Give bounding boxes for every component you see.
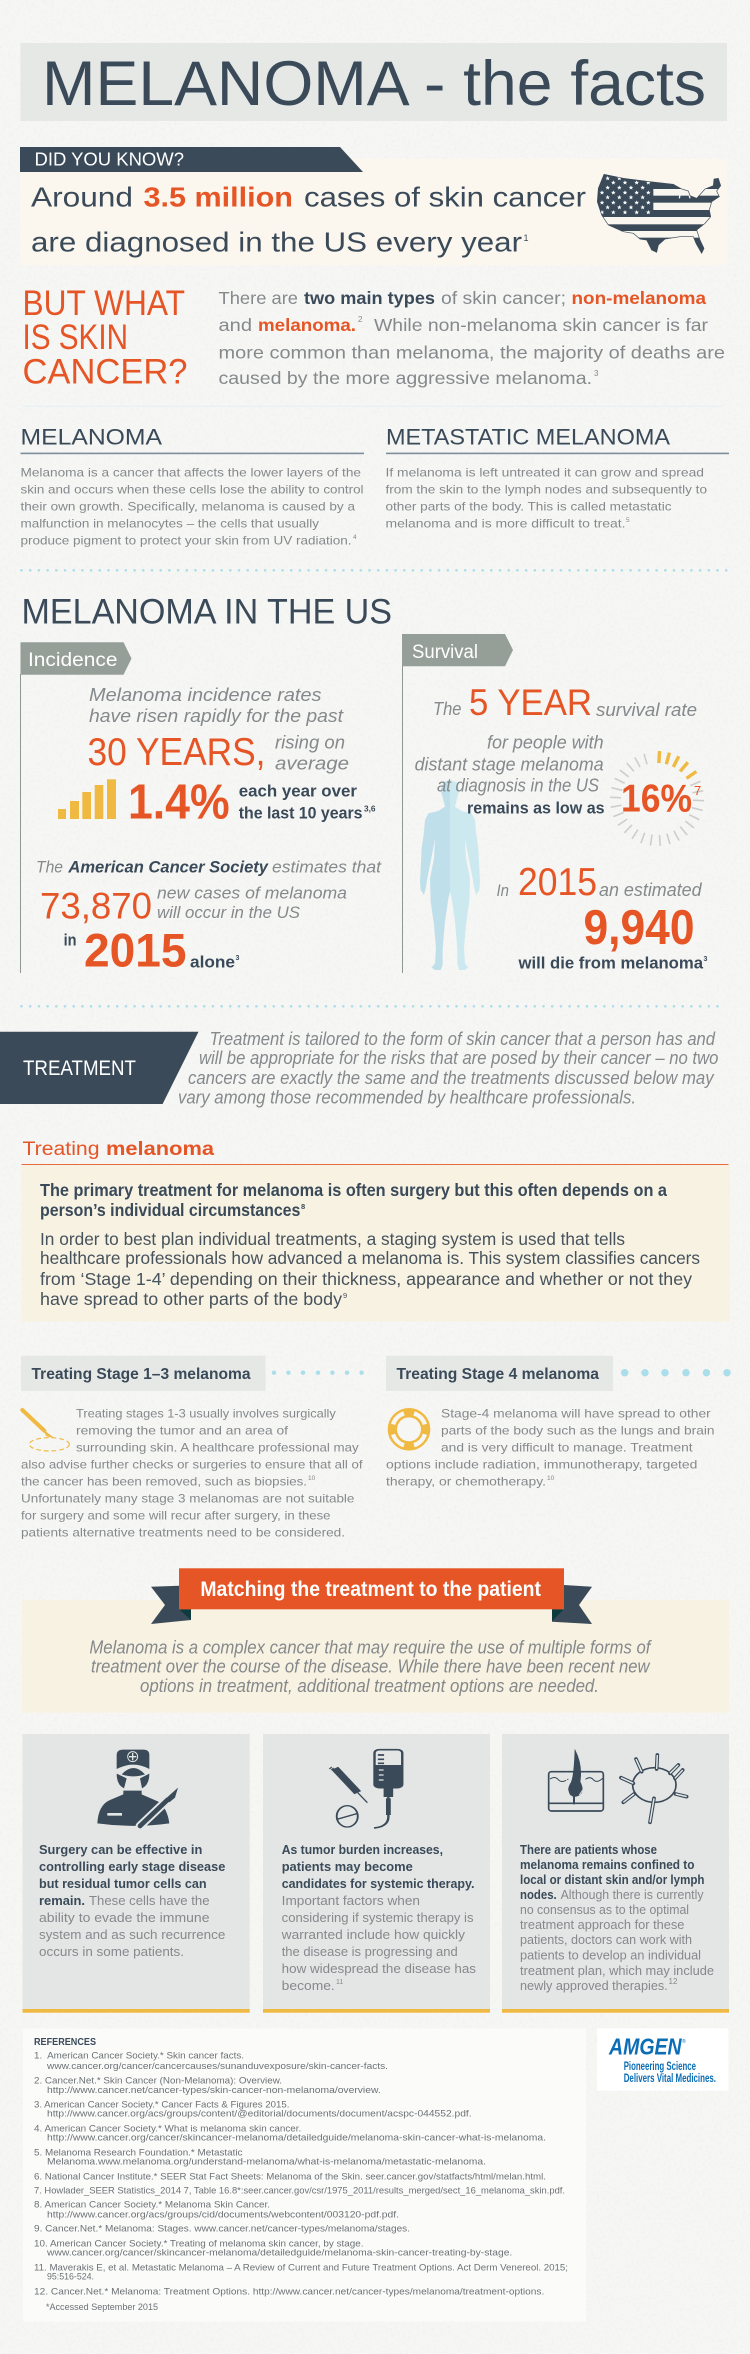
text: two main types of skin cancer: two main types (304, 288, 435, 308)
reference list: 1. American Cancer Society.* Skin cancer facts. (34, 2051, 244, 2062)
text: melanoma definition: malfunction in melanocytes – the cells that usually (20, 517, 319, 531)
reference list: http://www.cancer.org/acs/groups/cid/documents/webcontent/003120-pdf.pdf. (47, 2210, 399, 2221)
text: local or distant disease: melanoma remains confined to (520, 1857, 695, 1872)
text: local or distant disease: patients, doctors can work with (520, 1932, 692, 1947)
text: melanoma definition: 4 (353, 534, 357, 541)
text: treatment intro: will be appropriate for the risks that are posed by their cancer – no two (199, 1048, 718, 1068)
text: stage 1-3 description: surrounding skin. A healthcare professional may (76, 1441, 359, 1455)
text: local or distant disease: treatment approach for these (520, 1917, 684, 1932)
text: primary treatment statement: The primary treatment for melanoma is often surgery but this often depends on a (40, 1180, 667, 1200)
text: rates rising: 30 YEARS, (88, 731, 266, 774)
stat: 1.4 percent: 3,6 (364, 805, 376, 814)
chart: 16 percent radial gauge (610, 751, 704, 846)
panel: did you know (20, 147, 730, 265)
text: local or distant disease: no consensus as to the optimal (520, 1902, 689, 1917)
logo: Amgen (597, 2028, 728, 2091)
text: systemic therapy: candidates for systemic therapy. (282, 1876, 474, 1891)
reference list: 10. American Cancer Society.* Treating of melanoma skin cancer, by stage. (34, 2239, 364, 2250)
text: local or distant disease: nodes. (520, 1887, 557, 1902)
text: melanoma definition: their own growth. Specifically, melanoma is caused by a (20, 500, 355, 514)
reference list: 2. Cancer.Net.* Skin Cancer (Non-Melanoma): Overview. (34, 2076, 282, 2087)
text: stage 1-3 description: Unfortunately many stage 3 melanomas are not suitable (21, 1492, 355, 1506)
text: primary treatment statement: 8 (301, 1202, 305, 1211)
text: two main types of skin cancer: and (218, 315, 252, 335)
heading: metastatic melanoma: METASTATIC MELANOMA (386, 424, 670, 449)
stat: 73,870 new cases: 73,870 (40, 885, 152, 926)
text: stage 1-3 description: the cancer has been removed, such as biopsies. (21, 1475, 307, 1489)
text: American Cancer Society: American Cancer Society (67, 859, 269, 877)
text: two main types of skin cancer: 3 (594, 369, 599, 378)
text: surgery: system and as such recurrence (39, 1927, 225, 1942)
statistic text: 3.5 million (144, 182, 293, 213)
stat: 2015 an estimated: an estimated (599, 880, 703, 900)
text: systemic therapy: Important factors when (282, 1893, 420, 1908)
text: metastatic definition (386, 466, 707, 531)
statistic text: cases of skin cancer (304, 182, 586, 213)
ribbon: matching the treatment to the patient (151, 1568, 592, 1624)
text: systemic therapy: how widespread the disease has (282, 1961, 477, 1976)
stat: in 2015 alone: in (64, 931, 76, 950)
text: two main types of skin cancer: 2 (358, 315, 363, 324)
column: metastatic melanoma definition (386, 424, 729, 531)
tag: did you know (20, 147, 363, 172)
text: stage 1-3 description: patients alternative treatments need to be considered. (21, 1526, 345, 1540)
text: metastatic definition: If melanoma is left untreated it can grow and spread (386, 466, 704, 480)
icon: rising bars (58, 779, 116, 819)
text: surgery: occurs in some patients. (39, 1944, 184, 1959)
text: two main types of skin cancer: While non-melanoma skin cancer is far (374, 315, 708, 335)
text: systemic therapy: warranted include how quickly (281, 1927, 466, 1942)
heading: treating melanoma: Treating (22, 1139, 100, 1160)
text: stage 1-3 description: Treating stages 1-3 usually involves surgically (76, 1407, 336, 1421)
text: treatment intro: cancers are exactly the same and the treatments discussed below may (188, 1068, 715, 1088)
text: metastatic definition: from the skin to the lymph nodes and subsequently to (386, 483, 707, 497)
text: complex cancer (89, 1637, 652, 1696)
text: American Cancer Society (36, 859, 382, 877)
text: American Cancer Society: The (36, 859, 63, 877)
text: melanoma definition: Melanoma is a cancer that affects the lower layers of the (20, 466, 361, 480)
heading: stage 1-3 (21, 1356, 266, 1391)
heading: melanoma in the US: MELANOMA IN THE US (22, 592, 392, 631)
text: two main types of skin cancer: caused by the more aggressive melanoma. (218, 368, 592, 388)
reference list (34, 2051, 568, 2313)
text: treatment intro (178, 1029, 718, 1108)
stat: 73,870 new cases: new cases of melanoma (157, 883, 347, 902)
heading: stage 4: Treating Stage 4 melanoma (396, 1366, 599, 1383)
tag: survival (402, 634, 513, 666)
text: five year survival rate: distant stage melanoma (415, 755, 604, 775)
stat: 1.4 percent: each year over (239, 782, 357, 801)
text: staging system: have spread to other parts of the body (40, 1289, 342, 1309)
icon: surgeon (97, 1750, 178, 1826)
stat: 9,940 deaths: 9,940 (584, 901, 694, 955)
text: systemic therapy: considering if systemic therapy is (282, 1910, 474, 1925)
reference list: http://www.cancer.org/cancer/skincancer-melanoma/detailedguide/melanoma-skin-cancer-what-is-melanoma. (47, 2133, 546, 2144)
text: stage 4 description: therapy, or chemotherapy. (386, 1475, 546, 1489)
stat: 2015 an estimated: In (496, 881, 509, 900)
tag: survival: Survival (412, 642, 478, 663)
reference list: 12. Cancer.Net.* Melanoma: Treatment Options. http://www.cancer.net/cancer-types/melanoma/treatment-options. (34, 2287, 544, 2298)
text: stage 1-3 description: removing the tumor and an area of (76, 1424, 289, 1438)
card: surgery (22, 1734, 250, 2013)
text: local or distant disease: There are patients whose (520, 1842, 657, 1857)
card: local or distant disease (502, 1734, 729, 2013)
logo: Amgen: ® (682, 2038, 686, 2045)
column: treating stage 1-3 (21, 1356, 364, 1540)
logo: Amgen: AMGEN (608, 2034, 682, 2060)
text: stage 4 description (386, 1407, 714, 1489)
text: rates rising: Melanoma incidence rates (89, 685, 322, 705)
text: five year survival rate: at diagnosis in the US (437, 776, 599, 796)
text: two main types of skin cancer: non-melanoma (572, 288, 706, 308)
heading: stage 4 (386, 1356, 613, 1391)
text: stage 1-3 description: also advise further checks or surgeries to ensure that all of (21, 1458, 363, 1472)
text: surgery: Surgery can be effective in (39, 1842, 202, 1857)
tag: treatment (0, 1032, 198, 1104)
text: surgery: remain. (39, 1893, 85, 1908)
statistic text (31, 182, 586, 258)
panel: matching intro (22, 1600, 729, 1713)
ribbon: matching the treatment to the patient: Matching the treatment to the patient (200, 1578, 541, 1601)
reference list: http://www.cancer.org/acs/groups/content/@editorial/documents/document/acspc-044552.pdf. (47, 2109, 472, 2120)
text: melanoma definition: produce pigment to protect your skin from UV radiation. (20, 533, 352, 547)
text: local or distant disease: 12 (668, 1977, 678, 1986)
text: stage 4 description: options include radiation, immunotherapy, targeted (386, 1458, 697, 1472)
icon: human body (420, 780, 480, 970)
text: surgery: ability to evade the immune (39, 1910, 210, 1925)
text: staging system: In order to best plan individual treatments, a staging system is used that tells (40, 1229, 625, 1249)
text: rates rising (88, 685, 349, 774)
text: metastatic definition: melanoma and is more difficult to treat. (386, 517, 626, 531)
tag: treatment: TREATMENT (23, 1057, 136, 1080)
reference list: 3. American Cancer Society.* Cancer Facts & Figures 2015. (34, 2100, 289, 2111)
text: systemic therapy: 11 (336, 1979, 343, 1986)
tag: incidence (20, 642, 132, 675)
text: staging system: healthcare professionals how advanced a melanoma is. This system classifies cancers (40, 1248, 700, 1268)
text: systemic therapy: the disease is progressing and (282, 1944, 458, 1959)
text: melanoma definition (20, 466, 364, 547)
text: five year survival rate (415, 682, 697, 817)
icon: skin follicle and cell (549, 1750, 687, 1822)
text: systemic therapy (281, 1842, 477, 1993)
stat: 16 percent: 16% (621, 778, 692, 821)
heading: references: REFERENCES (34, 2036, 96, 2048)
text: stage 1-3 description: for surgery and some will recur after surgery, in these (21, 1509, 331, 1523)
column: treating stage 4 (386, 1356, 731, 1489)
text: local or distant disease: local or distant skin and/or lymph (520, 1872, 705, 1887)
text: two main types of skin cancer: There are (218, 288, 298, 308)
heading: stage 1-3: Treating Stage 1–3 melanoma (32, 1366, 251, 1383)
heading: melanoma: MELANOMA (20, 424, 162, 449)
stat: 16 percent: 7 (694, 783, 701, 798)
text: systemic therapy: patients may become (282, 1859, 413, 1874)
reference list: www.cancer.org/cancer/cancercauses/sunanduvexposure/skin-cancer-facts. (46, 2061, 388, 2072)
stat: 9,940 deaths: 3 (704, 956, 708, 963)
text: systemic therapy: become. (282, 1978, 335, 1993)
text: complex cancer: Melanoma is a complex cancer that may require the use of multiple forms of (89, 1637, 652, 1657)
text: rates rising: rising on (275, 732, 345, 752)
text: staging system: from ‘Stage 1-4’ depending on their thickness, appearance and whether or not they (40, 1269, 692, 1289)
stat: in 2015 alone (64, 924, 239, 977)
text: five year survival rate: 5 YEAR (469, 682, 592, 723)
heading: treating melanoma (22, 1139, 214, 1160)
stat: 73,870 new cases (40, 883, 347, 926)
reference list: 7. Howlader_SEER Statistics_2014 7, Table 16.8*:seer.cancer.gov/csr/1975_2011/results_merged/sect_16_melanoma_skin.pdf. (34, 2186, 565, 2197)
text: primary treatment statement: person’s individual circumstances (40, 1200, 301, 1220)
text: local or distant disease: patients to develop an individual (520, 1948, 701, 1963)
text: surgery: but residual tumor cells can (39, 1876, 207, 1891)
text: five year survival rate: remains as low as (467, 798, 605, 817)
text: five year survival rate: for people with (487, 733, 604, 753)
panel: incidence (20, 642, 382, 977)
panel: survival (402, 634, 708, 973)
reference list: 11. Maverakis E, et al. Metastatic Melanoma – A Review of Current and Future Treatment Options. Act Derm Venereol. 2015; (34, 2263, 568, 2274)
stat: 1.4 percent: 1.4% (128, 775, 230, 829)
text: local or distant disease (520, 1842, 714, 1993)
title banner: MELANOMA - the facts (42, 49, 706, 119)
stat: in 2015 alone: alone (190, 953, 235, 972)
text: two main types of skin cancer (218, 288, 725, 388)
icon: US flag map (597, 174, 721, 254)
reference list: 6. National Cancer Institute.* SEER Stat Fact Sheets: Melanoma of the Skin. seer.cancer.gov/statfacts/html/melan.html. (34, 2172, 546, 2183)
text: treatment intro: vary among those recommended by healthcare professionals. (178, 1088, 636, 1108)
text: treatment intro: Treatment is tailored to the form of skin cancer that a person has and (210, 1029, 716, 1049)
panel: references (23, 2028, 586, 2322)
text: American Cancer Society: estimates that (272, 859, 382, 877)
text: local or distant disease: treatment plan, which may include (520, 1963, 714, 1978)
stat: 1.4 percent: the last 10 years (239, 803, 362, 822)
stat: 1.4 percent (128, 775, 376, 829)
text: melanoma definition: skin and occurs when these cells lose the ability to control (20, 483, 364, 497)
reference list: 9. Cancer.Net.* Melanoma: Stages. www.cancer.net/cancer-types/melanoma/stages. (34, 2224, 410, 2235)
text: staging system: 9 (343, 1291, 347, 1300)
stat: 9,940 deaths (518, 901, 708, 972)
text: surgery: controlling early stage disease (39, 1859, 225, 1874)
stat: in 2015 alone: 3 (236, 955, 240, 962)
text: stage 4 description: and is very difficult to manage. Treatment (441, 1441, 693, 1455)
stat: 9,940 deaths: will die from melanoma (518, 953, 704, 972)
stat: 2015 an estimated (496, 861, 703, 904)
stat: in 2015 alone: 2015 (84, 924, 186, 977)
card: systemic therapy (263, 1734, 490, 2013)
text: metastatic definition: 5 (626, 517, 630, 524)
stat: 73,870 new cases: will occur in the US (157, 903, 301, 922)
reference list: 95:516-524. (47, 2272, 94, 2283)
text: rates rising: have risen rapidly for the past (89, 706, 344, 726)
text: complex cancer: options in treatment, additional treatment options are needed. (140, 1676, 599, 1696)
text: stage 1-3 description (21, 1407, 363, 1540)
column: melanoma definition (20, 424, 364, 547)
heading: but what is skin cancer: IS SKIN (22, 318, 128, 357)
text: complex cancer: treatment over the course of the disease. While there have been recent new (91, 1657, 650, 1677)
text: metastatic definition: other parts of the body. This is called metastatic (386, 500, 672, 514)
reference list: 8. American Cancer Society.* Melanoma Skin Cancer. (34, 2200, 270, 2211)
tag: incidence: Incidence (28, 650, 118, 671)
text: staging system (40, 1229, 700, 1309)
statistic text: Around (31, 182, 133, 213)
text: two main types of skin cancer: of skin cancer; (441, 288, 566, 308)
reference list: Melanoma.www.melanoma.org/understand-melanoma/what-is-melanoma/metastatic-melanoma. (47, 2157, 486, 2168)
text: primary treatment statement (40, 1180, 667, 1220)
text: two main types of skin cancer: more common than melanoma, the majority of deaths are (218, 342, 725, 362)
text: five year survival rate: survival rate (596, 700, 697, 720)
reference list: www.cancer.org/cancer/skincancer-melanoma/detailedguide/melanoma-skin-cancer-treating-by-stage. (46, 2248, 512, 2259)
statistic text: 1 (524, 233, 529, 243)
text: surgery: These cells have the (89, 1893, 210, 1908)
tag: did you know: DID YOU KNOW? (34, 149, 184, 170)
text: stage 4 description: Stage-4 melanoma will have spread to other (441, 1407, 711, 1421)
heading: but what is skin cancer: CANCER? (22, 352, 188, 391)
text: stage 4 description: parts of the body such as the lungs and brain (441, 1424, 714, 1438)
icon: scalpel and dashed lesion (22, 1410, 69, 1451)
reference list: 4. American Cancer Society.* What is melanoma skin cancer. (34, 2124, 301, 2135)
heading: but what is skin cancer (22, 284, 188, 391)
text: surgery (39, 1842, 225, 1959)
icon: lifebuoy (388, 1408, 430, 1451)
logo: Amgen: Pioneering Science (624, 2059, 696, 2073)
statistic text: are diagnosed in the US every year (31, 227, 522, 258)
heading: but what is skin cancer: BUT WHAT (22, 284, 185, 323)
text: rates rising: average (275, 753, 349, 773)
panel: primary treatment (22, 1164, 730, 1322)
heading: treating melanoma: melanoma (106, 1139, 214, 1160)
text: local or distant disease: newly approved therapies. (520, 1978, 668, 1993)
reference list: http://www.cancer.net/cancer-types/skin-cancer-non-melanoma/overview. (47, 2085, 381, 2096)
reference list: 5. Melanoma Research Foundation.* Metastatic (34, 2148, 243, 2159)
text: two main types of skin cancer: melanoma. (258, 315, 356, 335)
text: local or distant disease: Although there is currently (561, 1887, 704, 1902)
stat: 2015 an estimated: 2015 (518, 861, 597, 904)
reference list: *Accessed September 2015 (46, 2302, 158, 2313)
text: stage 4 description: 10 (547, 1475, 555, 1482)
icon: IV bag, syringe and pill (330, 1750, 402, 1828)
text: stage 1-3 description: 10 (308, 1475, 316, 1482)
text: five year survival rate: The (433, 699, 462, 719)
text: systemic therapy: As tumor burden increases, (282, 1842, 443, 1857)
